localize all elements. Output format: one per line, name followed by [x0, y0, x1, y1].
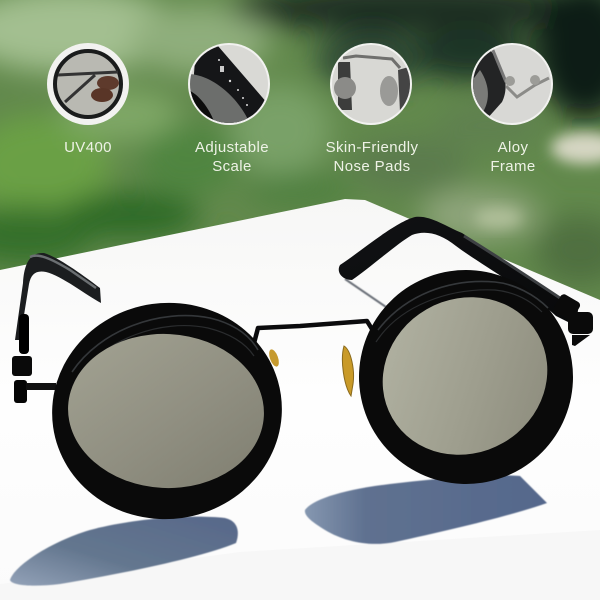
feature: UV400: [47, 43, 129, 156]
icon: alloy hinge: [471, 43, 553, 125]
left lens frame: [38, 288, 296, 534]
icon: lens with fingers: [47, 43, 129, 125]
feature: Aloy Frame: [471, 43, 553, 175]
shadow: left lens: [10, 517, 238, 586]
white table top: [0, 199, 600, 600]
shadow: right temple: [345, 279, 386, 307]
label: UV400: [64, 139, 112, 156]
near temple arm: right: [339, 217, 593, 346]
nose pad: left: [267, 348, 281, 368]
feature: Aloy Frame: Frame: [490, 158, 536, 175]
glasses: [12, 217, 600, 534]
blurred garden background: [0, 0, 600, 300]
feature: Skin-Friendly Nose Pads: [326, 43, 418, 175]
shadow: right lens: [305, 475, 547, 544]
label: Skin-Friendly: [326, 139, 418, 156]
nose pad: right: [342, 346, 354, 396]
table band at the bottom: [0, 530, 600, 600]
icon: scale on rim: [188, 43, 270, 125]
feature: Skin-Friendly Nose Pads: Nose Pads: [334, 158, 410, 175]
label: Aloy: [498, 139, 528, 156]
feature: Adjustable Scale: Scale: [212, 158, 252, 175]
left lens glass: [64, 329, 268, 493]
bridge: [253, 321, 375, 347]
right lens frame: [329, 240, 600, 514]
label: Adjustable: [195, 139, 269, 156]
feature: Adjustable Scale: [188, 43, 270, 175]
far temple arm: left: [12, 253, 101, 403]
right lens glass: [354, 267, 576, 485]
icon: nose bridge: [330, 43, 412, 125]
